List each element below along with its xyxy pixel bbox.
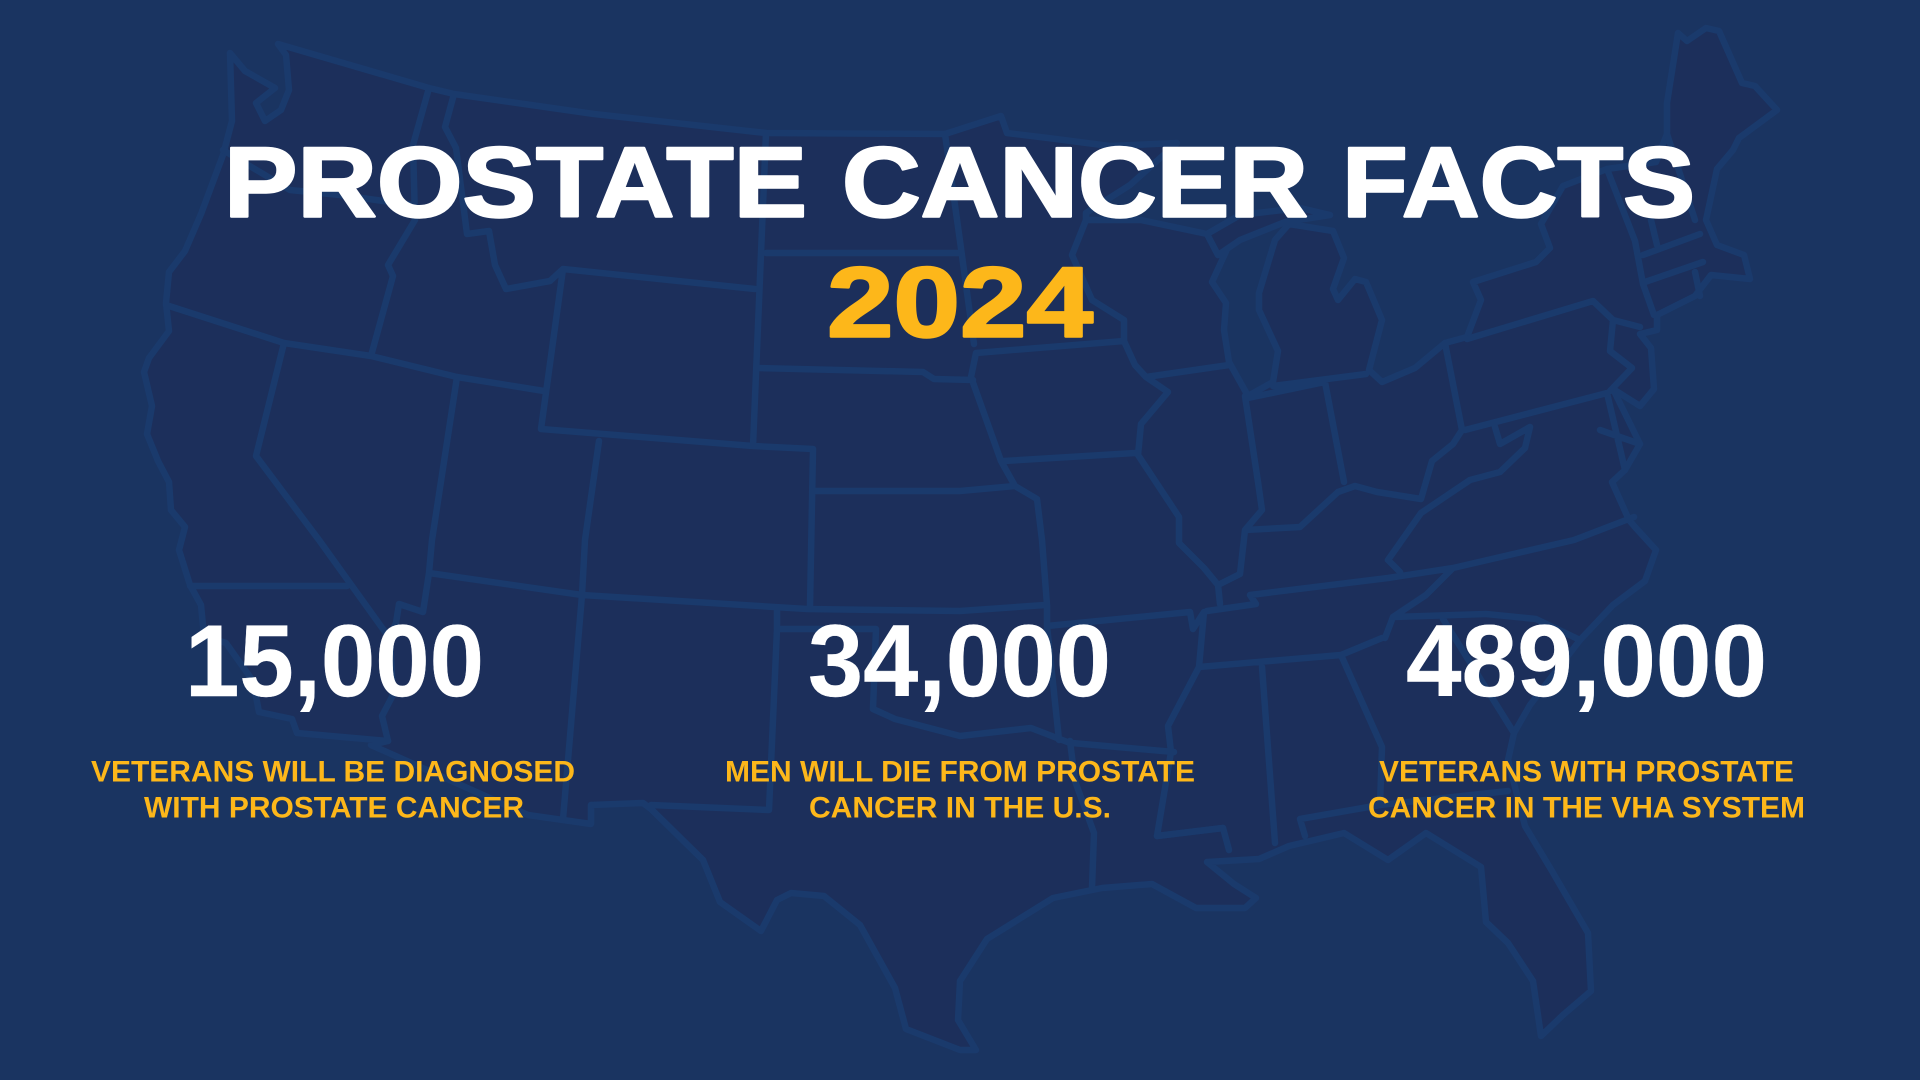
stat: veterans diagnosed <box>91 604 575 824</box>
map: upper peninsula of Michigan <box>1207 208 1330 255</box>
number: 34,000: 34,000 <box>808 604 1111 718</box>
number: 489,000: 489,000 <box>1406 604 1767 718</box>
number: 15,000: 15,000 <box>185 604 484 718</box>
stat: men will die <box>725 604 1195 824</box>
caption: men will die: MEN WILL DIE FROM PROSTATE <box>725 756 1195 788</box>
caption: veterans in VHA: CANCER IN THE VHA SYSTEM <box>1368 792 1805 824</box>
title: PROSTATE <box>224 126 807 238</box>
title: CANCER <box>842 126 1308 238</box>
map: eastern state borders <box>1157 134 1703 843</box>
caption: men will die: CANCER IN THE U.S. <box>809 792 1111 824</box>
caption: veterans in VHA: VETERANS WITH PROSTATE <box>1379 756 1794 788</box>
map: central state borders <box>758 134 1229 888</box>
map: western state borders <box>166 88 1070 819</box>
stat: veterans in VHA <box>1368 604 1805 824</box>
caption: veterans diagnosed: VETERANS WILL BE DIAGNOSED <box>91 756 575 788</box>
caption: veterans diagnosed: WITH PROSTATE CANCER <box>144 792 524 824</box>
title: FACTS <box>1342 126 1695 238</box>
year: 2024 <box>827 246 1093 358</box>
